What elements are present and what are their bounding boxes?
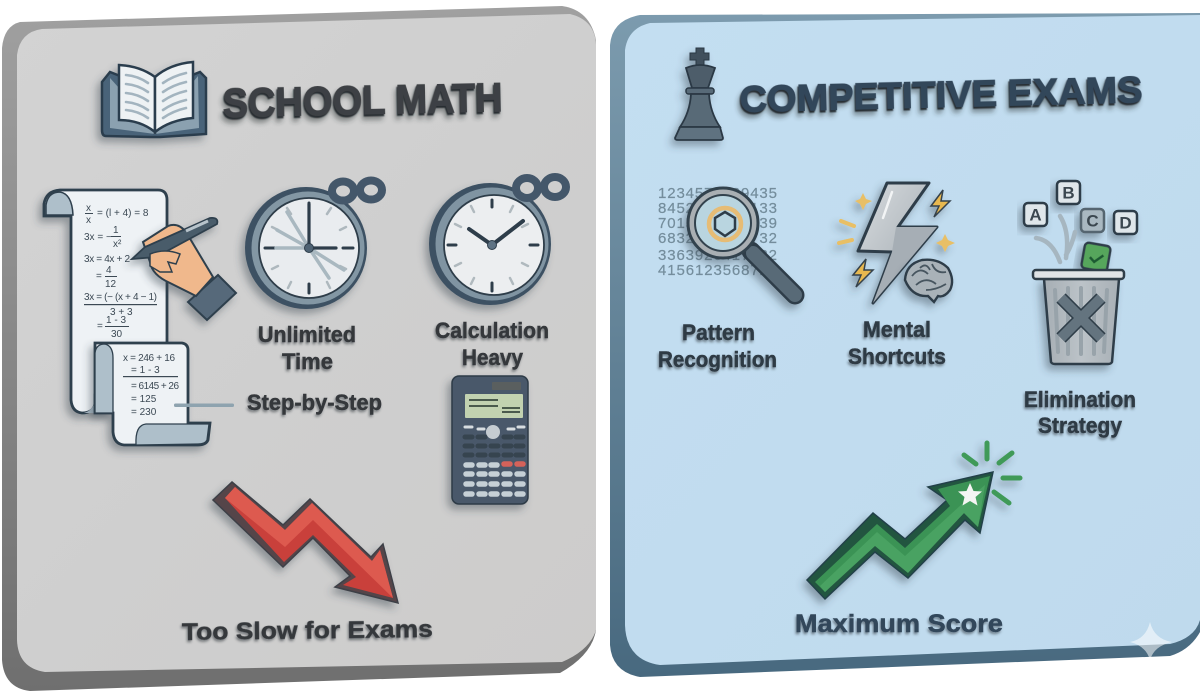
number grid: 415612356872 (658, 262, 768, 279)
tile: D: D (1119, 214, 1132, 232)
equations: lower scroll: x = 246 + 16 (123, 353, 175, 364)
label: pattern recognition (658, 320, 777, 372)
label: step-by-step: Step-by-Step (247, 390, 382, 415)
panel face: competitive exams (625, 15, 1200, 665)
number grid: 6832722086732 (658, 230, 777, 247)
label: calculation heavy: Heavy (462, 345, 524, 370)
panel face: school math (17, 14, 596, 672)
label: elimination strategy: Elimination (1024, 387, 1136, 412)
icon: infinity symbol (516, 177, 566, 198)
small bolts and sparks (839, 190, 955, 287)
label: pattern recognition: Pattern (682, 320, 755, 345)
icon: writing hand with pen (132, 218, 236, 320)
label: elimination strategy (1024, 387, 1136, 438)
lightning bolt (858, 183, 937, 303)
panel edge: school math (2, 6, 596, 691)
label: calculation heavy (435, 318, 549, 370)
label: pattern recognition: Recognition (658, 347, 777, 372)
label: mental shortcuts: Shortcuts (848, 344, 946, 369)
icon: clock calculation heavy (429, 177, 566, 305)
icon: infinity symbol (332, 180, 382, 200)
tile: A: A (1029, 206, 1042, 224)
falling motion swooshes (1036, 216, 1075, 262)
panel: competitive exams (610, 13, 1200, 677)
panel edge: competitive exams (610, 13, 1200, 677)
equations: upper scroll: = (96, 271, 102, 282)
burst rays (964, 443, 1020, 503)
icon: short scroll with equations (95, 343, 210, 445)
star (958, 483, 982, 506)
brain (905, 260, 952, 302)
equations: upper scroll (84, 203, 157, 340)
equations: lower scroll: = 1 - 3 (131, 365, 160, 376)
label: too slow for exams: Too Slow for Exams (182, 616, 433, 646)
icon: sparkle watermark (1130, 622, 1172, 660)
equations: upper scroll: 1 - 3 (106, 315, 126, 326)
heading: competitive exams: COMPETITIVE EXAMS (739, 69, 1143, 120)
equations: lower scroll: = 125 (131, 394, 157, 405)
equations: upper scroll: 1 (113, 225, 119, 236)
number grid (658, 185, 777, 279)
label: unlimited time (258, 322, 356, 374)
arrow: green upward trend (807, 443, 1020, 599)
icon: green check tile (1081, 242, 1111, 272)
icon: trash can (1033, 270, 1124, 364)
equations: lower scroll: = 6145 + 26 (131, 381, 179, 392)
icon: long scroll with equations (44, 190, 167, 413)
tile: B: B (1062, 184, 1075, 202)
pointer line to step-by-step (174, 404, 234, 407)
equations: lower scroll: = 230 (131, 407, 157, 418)
panel: school math (2, 6, 596, 691)
equations: upper scroll: 3x = 4x + 2 (84, 254, 130, 265)
equations: upper scroll: 12 (105, 279, 117, 290)
equations: upper scroll: x (86, 203, 91, 214)
equations: upper scroll: 4 (106, 265, 112, 276)
equations: upper scroll: x² (113, 239, 122, 250)
label: mental shortcuts: Mental (863, 317, 931, 342)
icon: letter tiles (1024, 181, 1137, 234)
label: mental shortcuts (848, 317, 946, 369)
equations: lower scroll (123, 353, 179, 418)
icon: chess king (675, 48, 723, 140)
number grid: 3363926417732 (658, 247, 777, 264)
icon: magnifying glass (688, 188, 795, 295)
label: unlimited time: Unlimited (258, 322, 356, 347)
number grid: 7015041528139 (658, 215, 777, 232)
heading: school math: SCHOOL MATH (222, 74, 503, 126)
arrow: red downward trend (213, 482, 398, 603)
number grid: 1234578929435 (658, 185, 777, 202)
icon: clock with unlimited time (245, 180, 382, 309)
icon: open book (102, 62, 206, 137)
label: maximum score: Maximum Score (795, 610, 1003, 638)
equations: upper scroll: 30 (111, 329, 123, 340)
label: unlimited time: Time (282, 349, 333, 374)
equations: upper scroll: 3x = (− (x + 4 − 1) (84, 292, 157, 303)
label: calculation heavy: Calculation (435, 318, 549, 343)
equations: upper scroll: = (l + 4) = 8 (97, 208, 149, 219)
number grid: 8452169400133 (658, 200, 777, 217)
equations: upper scroll: = (97, 321, 103, 332)
label: elimination strategy: Strategy (1038, 413, 1123, 438)
equations: upper scroll: 3 + 3 (110, 307, 133, 318)
equations: upper scroll: x (86, 215, 91, 226)
icon: lightning bolt with brain (839, 183, 955, 303)
equations: upper scroll: 3x = − (84, 232, 112, 243)
tile: C: C (1086, 212, 1099, 230)
icon: calculator (452, 376, 528, 504)
